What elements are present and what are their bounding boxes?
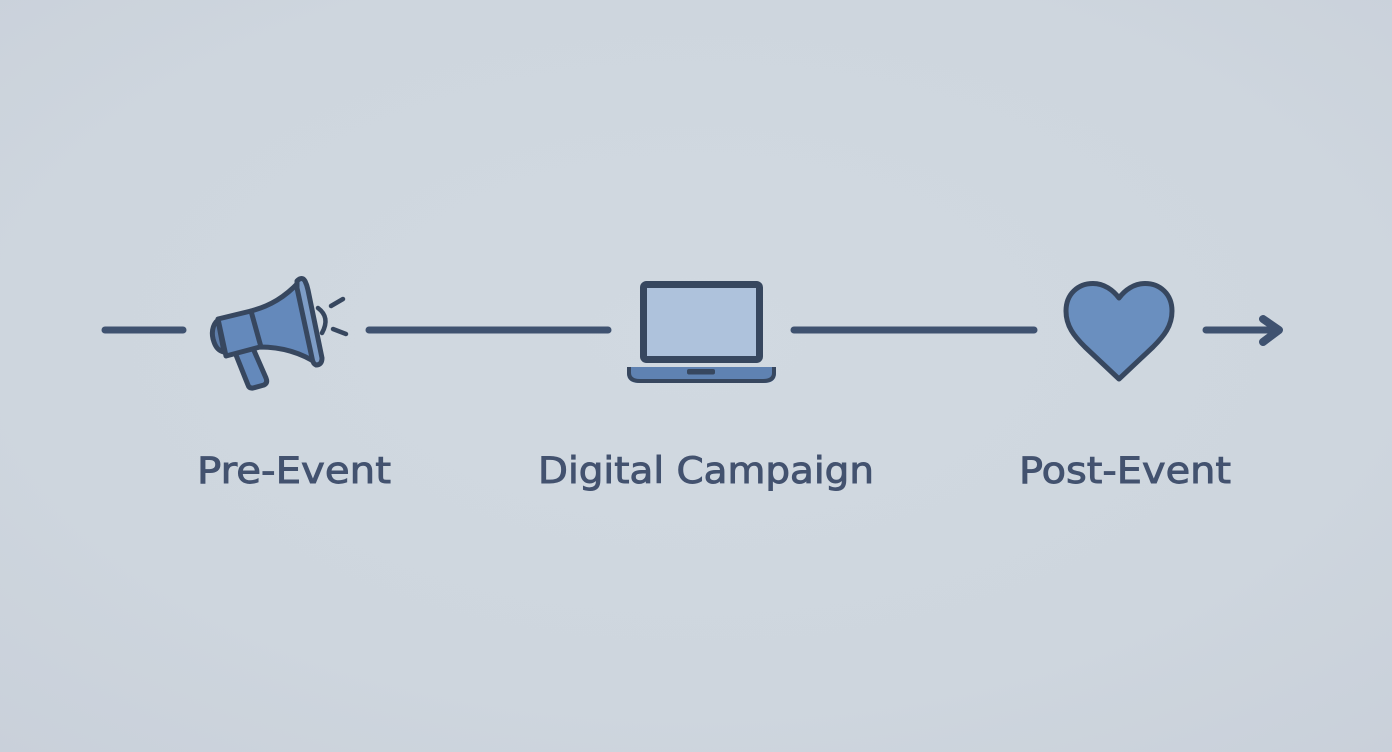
- label: Post-Event: Post-Event: [1019, 449, 1231, 492]
- timeline segment: lead-in: [105, 326, 183, 334]
- icon: megaphone: [212, 278, 346, 388]
- icon: heart: [1066, 284, 1172, 379]
- timeline segment: digital to post-event: [794, 326, 1034, 334]
- arrow: continuation: [1206, 319, 1279, 342]
- label: Digital Campaign: Digital Campaign: [538, 449, 874, 492]
- label: Pre-Event: Pre-Event: [197, 449, 391, 492]
- timeline segment: pre-event to digital: [369, 326, 608, 334]
- icon: laptop: [627, 284, 776, 383]
